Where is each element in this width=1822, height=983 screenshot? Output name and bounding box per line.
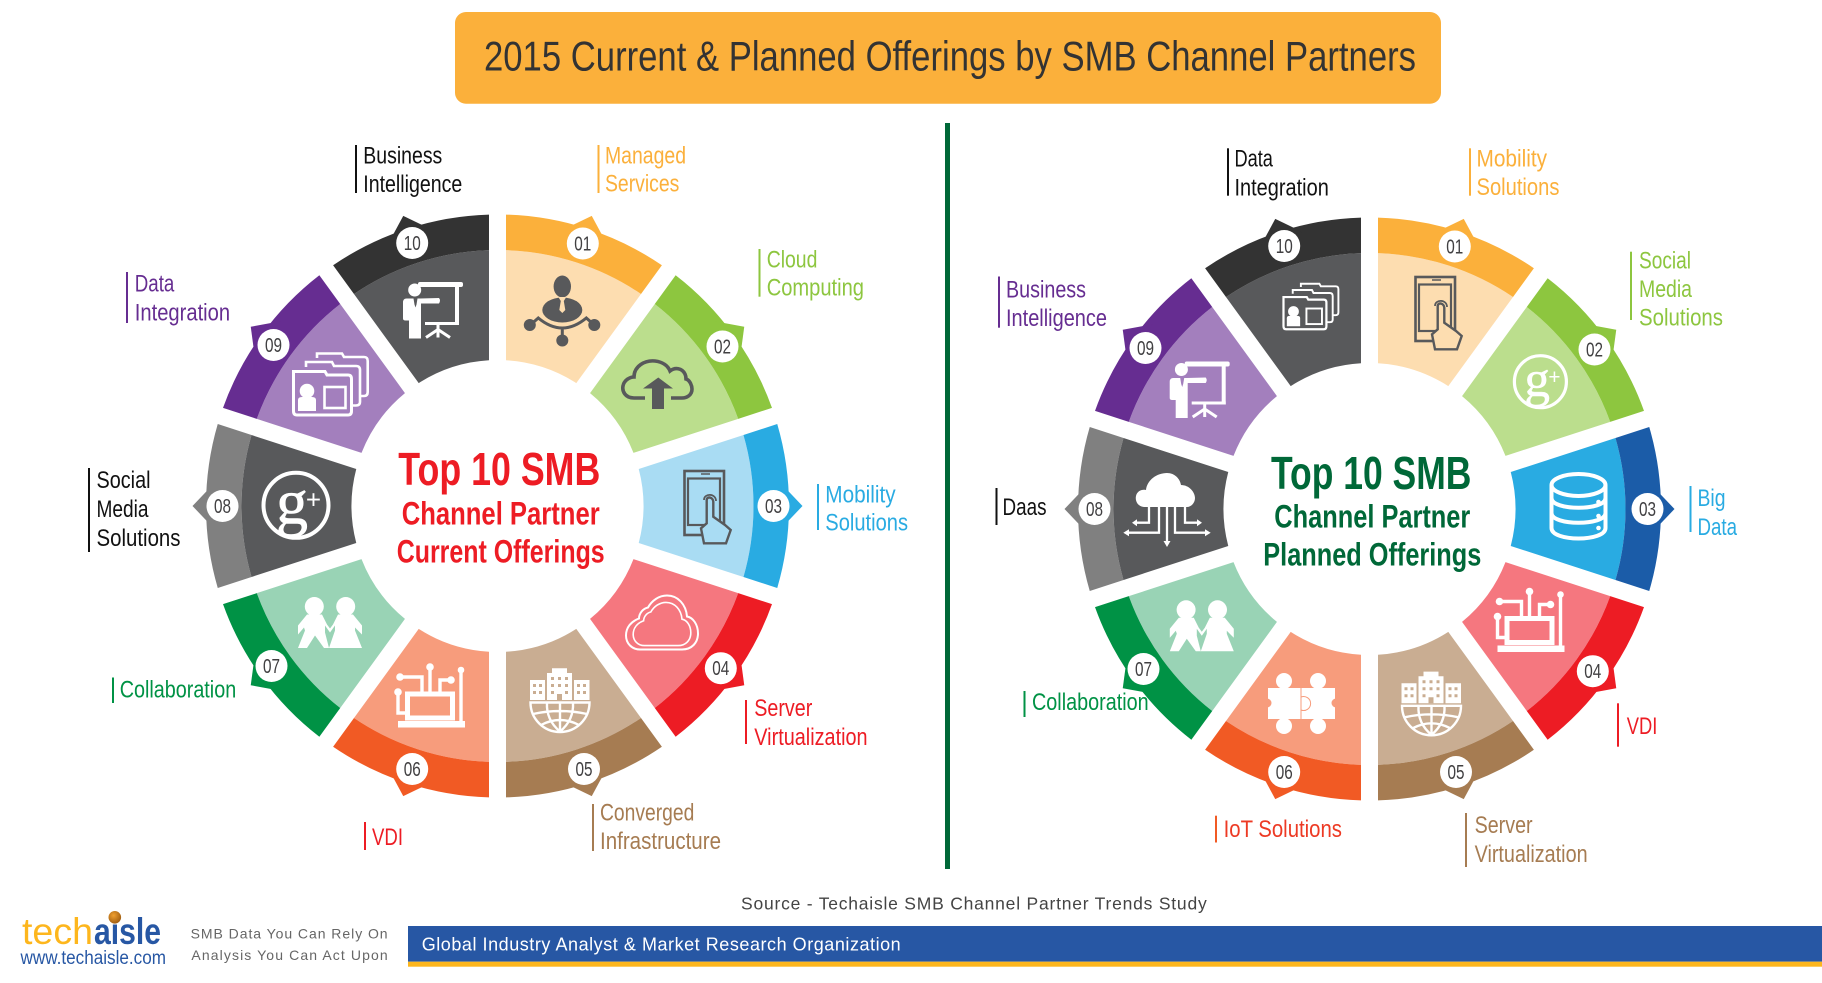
segment 06 VDI <box>333 629 489 797</box>
icon: database <box>1552 474 1606 538</box>
label: Business Intelligence planned: Intelligence <box>1006 305 1107 332</box>
segment 05 Converged Infrastructure <box>454 610 662 838</box>
badge 10: 10 <box>404 233 421 255</box>
badge 01 <box>1439 230 1471 262</box>
label: Mobility Solutions planned: Mobility <box>1476 146 1548 173</box>
badge 06 <box>396 753 428 785</box>
label: Social Media Solutions current: Media <box>96 496 149 523</box>
badge 05 <box>568 753 600 785</box>
icon: globe and buildings <box>1402 672 1461 735</box>
segment 03 Mobility Solutions <box>617 424 825 605</box>
label: Social Media Solutions current: Solutions <box>96 525 180 552</box>
badge 04 <box>1577 655 1609 687</box>
footer logo: tech <box>22 911 93 952</box>
segment 10 Data Integration <box>1205 177 1413 405</box>
label: Server Virtualization: Server <box>754 695 812 722</box>
icon: google plus: + <box>306 484 321 514</box>
badge 03 <box>1632 493 1664 525</box>
label: Social Media Solutions planned <box>1630 247 1723 332</box>
label: VDI planned: VDI <box>1627 713 1657 740</box>
label: Cloud Computing <box>758 246 864 302</box>
label: Server Virtualization planned: Server <box>1475 812 1533 839</box>
label: Mobility Solutions planned <box>1469 146 1559 201</box>
center heading: current offerings: Channel Partner <box>402 495 600 531</box>
icon: paper dolls <box>1170 600 1234 651</box>
badge 01: 01 <box>574 234 591 256</box>
label: Mobility Solutions planned: Solutions <box>1476 174 1559 201</box>
badge 03: 03 <box>765 496 782 518</box>
icon: google plus: g <box>1524 351 1550 408</box>
icon: presenter <box>1170 362 1230 418</box>
icon: cloud upload <box>623 361 692 409</box>
badge 08 <box>206 490 238 522</box>
icon: cloud outline <box>626 596 698 650</box>
panel divider: current vs planned <box>945 123 950 869</box>
panel: current offerings wheel <box>170 174 825 838</box>
badge 01 <box>567 228 599 260</box>
badge 07 <box>256 650 288 682</box>
badge 04: 04 <box>1584 661 1601 683</box>
badge 03 <box>758 490 790 522</box>
icon: google plus <box>264 466 328 538</box>
badge 09: 09 <box>265 335 282 357</box>
badge 09 <box>258 329 290 361</box>
label: Collaboration current: Collaboration <box>120 676 236 704</box>
label: Daas: Daas <box>1002 494 1046 521</box>
badge 04: 04 <box>712 658 729 680</box>
badge 08: 08 <box>214 496 231 518</box>
label: Data Integration current: Integration <box>135 300 230 327</box>
label: Social Media Solutions current: Social <box>96 467 150 494</box>
center heading: current offerings: Current Offerings <box>397 534 605 570</box>
label: Cloud Computing: Cloud <box>767 246 817 273</box>
segment 10 Business Intelligence <box>333 174 541 402</box>
segment 06 IoT Solutions <box>1205 632 1361 800</box>
footer tagline: SMB Data You Can Rely On <box>191 926 388 942</box>
label: Cloud Computing: Computing <box>767 275 864 302</box>
badge 06: 06 <box>1276 762 1293 784</box>
center heading: planned offerings: Planned Offerings <box>1263 537 1481 573</box>
segment 03 Big Data <box>1489 427 1697 608</box>
segment 09 Data Integration <box>223 260 425 460</box>
icon: phone touch <box>1416 277 1462 349</box>
label: Big Data <box>1690 485 1737 541</box>
label: Server Virtualization planned <box>1465 812 1588 868</box>
label: Converged Infrastructure: Converged <box>600 800 694 826</box>
label: Data Integration planned: Data <box>1234 146 1273 173</box>
icon: google plus <box>1514 351 1566 408</box>
title banner: 2015 Current & Planned Offerings by SMB Channel Partners <box>484 33 1416 80</box>
badge 02: 02 <box>1586 340 1603 362</box>
segment 07 Collaboration <box>193 521 418 737</box>
badge 02: 02 <box>714 336 731 358</box>
segment 01 Managed Services <box>506 215 662 383</box>
badge 05: 05 <box>576 759 592 781</box>
center heading: current offerings: Top 10 SMB <box>398 443 600 495</box>
footer logo: www.techaisle.com <box>20 948 166 969</box>
label: Mobility Solutions: Mobility <box>825 481 896 508</box>
footer banner: Global Industry Analyst & Market Research Organization <box>422 935 901 955</box>
label: Server Virtualization planned: Virtualization <box>1475 841 1588 868</box>
label: Social Media Solutions planned: Solutions <box>1639 304 1723 332</box>
source note: Source - Techaisle SMB Channel Partner Trends Study <box>741 893 1207 913</box>
label: Mobility Solutions <box>817 481 908 537</box>
icon: folder cards <box>1283 284 1338 329</box>
label: VDI current <box>364 822 403 851</box>
footer logo: aisle <box>94 911 161 952</box>
segment 05 Server Virtualization <box>1326 613 1534 841</box>
segment 07 Collaboration <box>1065 524 1290 740</box>
panel: planned offerings wheel <box>1042 177 1697 841</box>
label: Social Media Solutions planned: Media <box>1639 276 1692 303</box>
segment 02 Cloud Computing <box>577 275 802 491</box>
badge 08 <box>1078 493 1110 525</box>
icon: google plus: g <box>276 466 308 537</box>
badge 10 <box>396 227 428 259</box>
badge 05: 05 <box>1448 762 1464 784</box>
icon: folder cards <box>294 354 368 415</box>
center heading: current offerings <box>397 443 605 570</box>
label: Managed Services <box>598 142 686 198</box>
label: Mobility Solutions: Solutions <box>825 510 908 537</box>
icon: phone touch <box>684 471 731 543</box>
segment 02 Social Media Solutions <box>1449 278 1674 494</box>
segment 04 VDI <box>1442 555 1644 755</box>
footer banner <box>408 926 1822 967</box>
badge 06 <box>1268 756 1300 788</box>
label: Social Media Solutions planned: Social <box>1639 247 1691 274</box>
label: Big Data: Data <box>1698 514 1737 541</box>
icon: circuit monitor <box>1494 588 1564 652</box>
icon: cloud with arrows <box>1123 473 1211 547</box>
badge 02 <box>706 330 738 362</box>
segment 08 Social Media Solutions <box>170 407 378 588</box>
center heading: planned offerings <box>1263 447 1481 573</box>
badge 09 <box>1130 332 1162 364</box>
badge 07 <box>1128 653 1160 685</box>
segment 09 Business Intelligence <box>1095 263 1297 463</box>
label: Managed Services: Managed <box>605 142 686 169</box>
label: Business Intelligence <box>355 142 462 198</box>
label: Server Virtualization: Virtualization <box>754 724 868 751</box>
badge 10 <box>1268 230 1300 262</box>
badge 07: 07 <box>263 656 280 678</box>
label: Data Integration planned <box>1227 146 1329 202</box>
badge 07: 07 <box>1135 659 1152 681</box>
badge 05 <box>1440 756 1472 788</box>
label: Data Integration current <box>126 271 230 327</box>
badge 01: 01 <box>1446 236 1463 258</box>
label: Daas <box>996 488 1046 525</box>
icon: circuit monitor <box>394 663 465 728</box>
label: Collaboration planned: Collaboration <box>1032 689 1149 716</box>
label: Business Intelligence planned: Business <box>1006 276 1086 304</box>
title banner <box>455 12 1441 104</box>
label: Big Data: Big <box>1698 485 1726 512</box>
label: Social Media Solutions current <box>88 467 180 552</box>
label: Converged Infrastructure: Infrastructure <box>600 828 721 855</box>
label: IoT Solutions: IoT Solutions <box>1224 816 1342 843</box>
segment 01 Mobility Solutions <box>1378 218 1534 386</box>
label: Converged Infrastructure <box>592 800 721 855</box>
label: Business Intelligence planned <box>998 276 1107 332</box>
badge 06: 06 <box>404 759 421 781</box>
badge 03: 03 <box>1639 499 1656 521</box>
icon: paper dolls <box>298 597 362 648</box>
badge 04 <box>705 652 737 684</box>
center heading: planned offerings: Top 10 SMB <box>1271 447 1471 499</box>
label: Data Integration planned: Integration <box>1234 175 1329 202</box>
badge 10: 10 <box>1276 236 1293 258</box>
label: Managed Services: Services <box>605 171 679 198</box>
label: Business Intelligence: Intelligence <box>363 171 462 198</box>
badge 08: 08 <box>1086 499 1103 521</box>
label: Data Integration current: Data <box>135 271 175 298</box>
footer tagline: Analysis You Can Act Upon <box>191 947 388 963</box>
footer logo <box>20 911 166 969</box>
center heading: planned offerings: Channel Partner <box>1274 498 1470 534</box>
icon: puzzle <box>1262 673 1340 734</box>
icon: presenter <box>403 282 463 338</box>
label: VDI planned <box>1617 703 1657 747</box>
icon: google plus: + <box>1548 366 1560 389</box>
label: Business Intelligence: Business <box>363 142 442 169</box>
segment 08 Daas <box>1042 410 1250 591</box>
icon: person network <box>524 276 600 346</box>
badge 09: 09 <box>1137 338 1154 360</box>
icon: globe and buildings <box>530 668 590 732</box>
label: VDI current: VDI <box>372 824 403 851</box>
label: Server Virtualization <box>745 695 868 751</box>
badge 02 <box>1578 334 1610 366</box>
segment 04 Server Virtualization <box>570 552 772 752</box>
footer tagline <box>191 926 388 963</box>
